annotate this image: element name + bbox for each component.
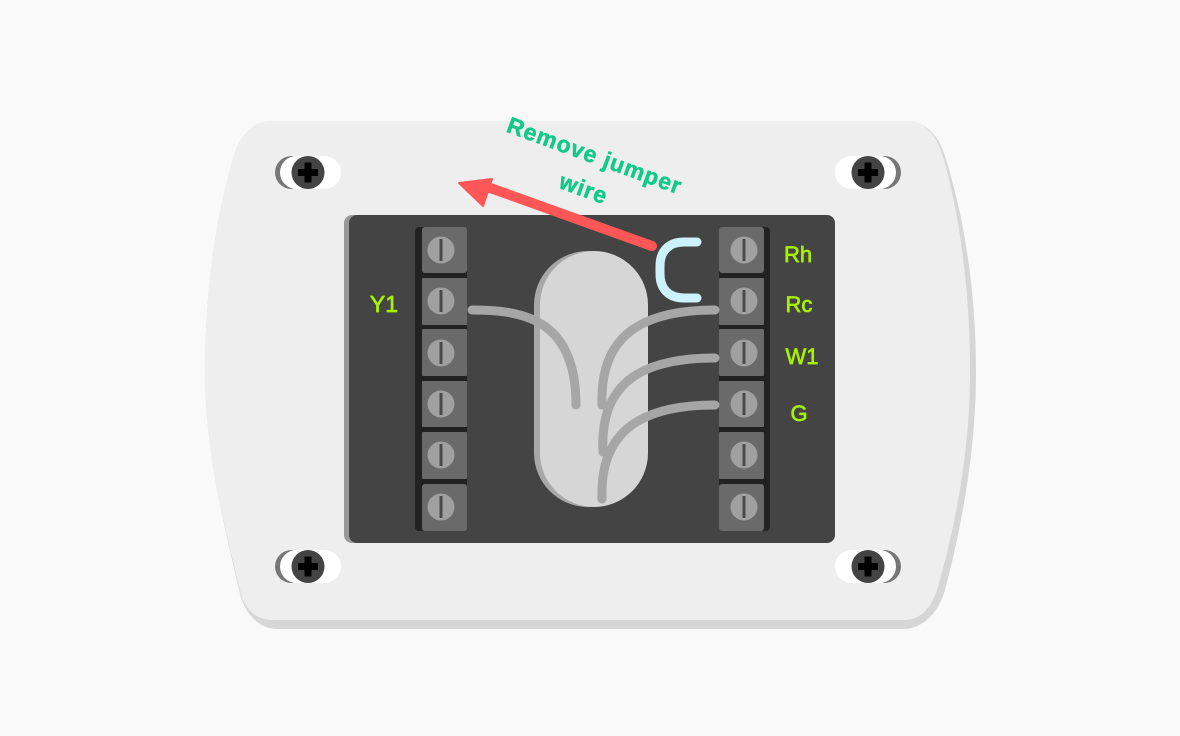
screw: top right bbox=[835, 156, 901, 189]
callout: remove jumper wire: Remove jumper bbox=[504, 112, 686, 199]
screw: bottom right bbox=[835, 550, 901, 583]
terminal label: G: G bbox=[790, 401, 808, 426]
left terminal block bbox=[415, 227, 467, 531]
wire opening bbox=[534, 251, 648, 507]
terminal label: W1: W1 bbox=[786, 344, 818, 369]
right terminal block bbox=[719, 227, 770, 531]
terminal label: Rh: Rh bbox=[784, 242, 812, 267]
terminal label: Y1: Y1 bbox=[370, 291, 398, 317]
terminal label: Rc: Rc bbox=[786, 292, 812, 317]
screw: bottom left bbox=[275, 550, 341, 583]
callout: remove jumper wire: wire bbox=[555, 167, 611, 209]
screw: top left bbox=[275, 156, 341, 189]
jumper wire bbox=[660, 242, 697, 298]
terminal panel bbox=[344, 215, 835, 543]
wall plate bbox=[205, 121, 976, 629]
wires bbox=[472, 310, 715, 499]
arrow: remove jumper bbox=[459, 179, 652, 246]
